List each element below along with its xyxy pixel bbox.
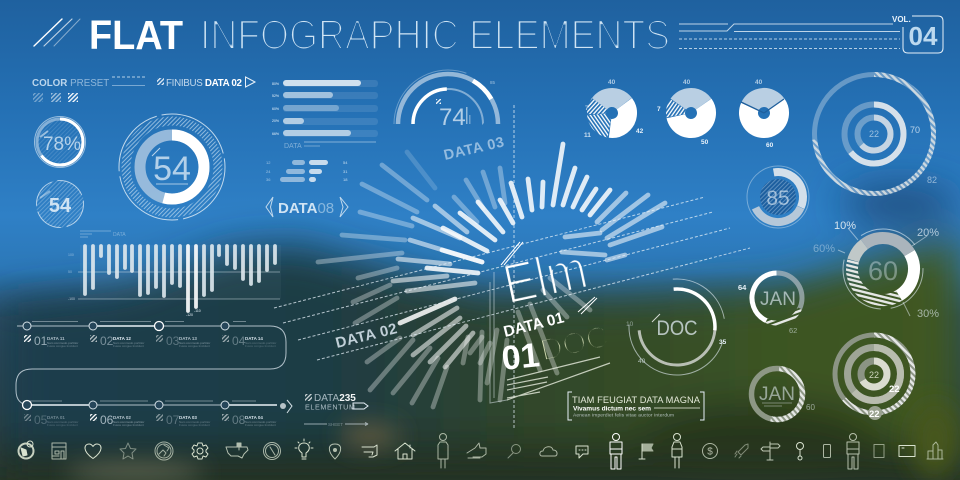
- gauge: JAN upper: JAN: [760, 289, 796, 310]
- donut: 54 large: [119, 114, 225, 220]
- icon: dollar coin: $: [707, 446, 713, 458]
- timeline row 1 labels: Nam commodo porttitor: [179, 341, 210, 345]
- gauge: 74: [380, 56, 516, 192]
- data08 label: DATA08: [278, 200, 334, 217]
- donut: 60 with percent labels: 60: [868, 256, 898, 286]
- timeline row 1 labels: Nam commodo porttitor: [47, 341, 78, 345]
- gauge: 74: 74: [439, 104, 466, 131]
- bar chart: -120: [186, 313, 193, 317]
- label: data 03: DATA 03: [442, 134, 506, 164]
- gauge: JAN lower: [749, 366, 815, 422]
- pie 3: [741, 79, 786, 149]
- timeline row 1 labels: 01: [34, 334, 48, 348]
- bar chart: -100: [68, 297, 75, 301]
- central Elm title block: 01: [500, 336, 541, 378]
- bar list chart: [272, 80, 378, 150]
- gauge: 78%: [34, 116, 86, 168]
- timeline row 1 labels: DATA 12: [113, 336, 131, 341]
- data235 elementum label: [304, 393, 368, 427]
- pie 2: 40: [683, 79, 691, 86]
- gauge: 78%: 78%: [43, 134, 81, 155]
- icon: house: [395, 443, 415, 459]
- timeline row 2 labels: Nam commodo porttitor: [113, 420, 144, 424]
- timeline row 1 labels: DATA 11: [47, 336, 65, 341]
- pie 3: 60: [766, 142, 774, 149]
- central Elm title block: [490, 237, 612, 403]
- butterfly bar chart: 12: [266, 160, 271, 165]
- gauge: 54 small: 54: [49, 195, 72, 217]
- butterfly bar chart: 24: [266, 169, 271, 174]
- icon: pointing hand: [362, 445, 377, 457]
- icon: store: [52, 443, 66, 459]
- timeline emphasis segments: [27, 326, 277, 405]
- timeline row 1 labels: Nam commodo porttitor: [113, 341, 144, 345]
- bar list chart: 20%: [272, 119, 279, 123]
- title: FLAT: FLAT: [89, 12, 183, 58]
- central Elm title block: DATA 01: [502, 309, 566, 341]
- timeline row 1 labels: 04: [232, 334, 246, 348]
- icon: woman figure 2: [672, 434, 682, 468]
- timeline row 2 labels: Fusce congue tincidunt: [113, 423, 144, 427]
- bar list chart: 60%: [272, 107, 279, 111]
- concentric rings: 22 / 70 / 82: 22: [869, 129, 879, 139]
- callout: tiam feugiat: TIAM FEUGIAT DATA MAGNA: [572, 395, 701, 405]
- timeline row 1 labels: Fusce congue tincidunt: [245, 344, 276, 348]
- color preset header: [32, 77, 145, 102]
- timeline row 2 labels: DATA 03: [179, 415, 197, 420]
- gauge: 85: 85: [766, 187, 790, 210]
- timeline row 2 labels: Nam commodo porttitor: [47, 420, 78, 424]
- gauge: DOC: [625, 275, 729, 379]
- gauge: JAN upper: [738, 265, 810, 335]
- icon: rocket: [735, 444, 748, 458]
- icon: key pin: [796, 442, 804, 460]
- bar list chart: 66%: [272, 132, 279, 136]
- gauge: DOC: 10: [626, 321, 634, 328]
- icon: gear: [192, 443, 208, 459]
- bar list chart: DATA: [284, 143, 302, 150]
- pie 1: [584, 79, 644, 139]
- icon: bulb: [295, 439, 313, 459]
- pie 1: 7: [585, 105, 589, 112]
- donut: 60 with percent labels: [813, 220, 939, 320]
- icon: buildings: [927, 442, 943, 459]
- timeline row 1 labels: 02: [100, 334, 114, 348]
- timeline row 2 labels: 06: [100, 413, 114, 427]
- timeline row 1 labels: DATA 14: [245, 336, 263, 341]
- timeline row 1 labels: Nam commodo porttitor: [245, 341, 276, 345]
- timeline row 2 labels: Fusce congue tincidunt: [179, 423, 210, 427]
- gauge: 85: [745, 164, 811, 230]
- timeline row 1 labels: Fusce congue tincidunt: [113, 344, 144, 348]
- volume badge: 04: [909, 21, 938, 51]
- icon: dollar coin: [702, 444, 718, 458]
- butterfly bar chart: 54: [343, 160, 348, 165]
- icon: man figure bright: [610, 434, 622, 469]
- pie 2: 7: [657, 106, 661, 113]
- timeline row 2 labels: Fusce congue tincidunt: [245, 423, 276, 427]
- icon: phone: [824, 444, 830, 458]
- data235 elementum label: SHEET: [328, 422, 343, 427]
- concentric rings: 22 / 70 / 82: 82: [927, 175, 937, 185]
- finibus data header: FINIBUS DATA 02: [166, 78, 243, 89]
- timeline row 1 labels: Fusce congue tincidunt: [179, 344, 210, 348]
- icon: tablet: [874, 444, 884, 458]
- icon: globe pin: [18, 441, 34, 458]
- concentric rings: 22 lower: [835, 335, 913, 420]
- central Elm title block: Elm: [497, 237, 593, 316]
- icon: magnifier: [508, 444, 520, 458]
- bar chart: DATA: [113, 232, 126, 238]
- concentric rings: 22 lower: 22: [889, 384, 900, 395]
- timeline row 2 labels: 08: [232, 413, 246, 427]
- icon: man figure: [847, 434, 859, 469]
- donut: 60 with percent labels: 30%: [917, 308, 939, 320]
- sunburst rays: [318, 144, 665, 407]
- gauge: JAN lower: 60: [806, 403, 815, 412]
- pie 2: 50: [701, 139, 709, 146]
- donut: 54 large: 54: [153, 150, 191, 188]
- timeline row 2 labels: 07: [166, 413, 180, 427]
- title slashes: [34, 19, 80, 46]
- gauge: JAN upper: 62: [789, 326, 797, 335]
- donut: 60 with percent labels: 10%: [834, 220, 856, 232]
- gauge: 54 small: [36, 180, 84, 228]
- icon: map marker: [329, 444, 341, 459]
- gauge: DOC: 40: [638, 358, 646, 365]
- gauge: DOC: DOC: [656, 317, 698, 340]
- icon: cloud: [540, 447, 557, 456]
- timeline path: [16, 326, 286, 405]
- icon: woman figure: [438, 434, 448, 468]
- bar chart: 100: [68, 253, 74, 257]
- timeline row 1 labels: Fusce congue tincidunt: [47, 344, 78, 348]
- callout: tiam feugiat: Aenean imperdiet felis vitae auctor interdum: [573, 412, 674, 418]
- donut: 60 with percent labels: 60%: [813, 243, 835, 255]
- donut: 60 with percent labels: 20%: [917, 227, 939, 239]
- butterfly bar chart: [266, 160, 348, 182]
- butterfly bar chart: 31: [343, 169, 348, 174]
- central Elm title block: DOC: [537, 318, 612, 368]
- icon: heart: [85, 444, 101, 458]
- butterfly bar chart: 18: [343, 177, 348, 182]
- icon: clock: [264, 442, 280, 460]
- concentric rings: 22 lower: 22: [869, 370, 879, 380]
- data235 elementum label: DATA235: [314, 393, 356, 404]
- timeline row 2 labels: Nam commodo porttitor: [179, 420, 210, 424]
- timeline row 1 labels: [24, 334, 276, 348]
- icon: world: [155, 442, 173, 460]
- pie 2: [657, 79, 713, 146]
- callout: tiam feugiat: Vivamus dictum nec sem: [573, 406, 651, 412]
- icon: star: [120, 443, 136, 459]
- title: INFOGRAPHIC ELEMENTS: INFOGRAPHIC ELEMENTS: [200, 11, 670, 58]
- gauge: 74: 85: [490, 80, 496, 85]
- data08 label: [266, 197, 348, 217]
- callout: tiam feugiat: [568, 392, 704, 420]
- icon: chat bubble: [576, 446, 588, 458]
- butterfly bar chart: 36: [266, 177, 271, 182]
- data235 elementum label: ELEMENTUM: [305, 402, 356, 412]
- concentric rings: 22 / 70 / 82: 70: [910, 125, 920, 135]
- timeline row 2 labels: [24, 413, 276, 427]
- concentric rings: 22 / 70 / 82: [814, 74, 937, 194]
- bar chart: -110: [194, 309, 201, 313]
- icon: laptop: [899, 446, 915, 456]
- timeline row 2 labels: 05: [34, 413, 48, 427]
- color preset header: COLOR PRESET: [32, 78, 109, 89]
- bar list chart: 80%: [272, 82, 279, 86]
- gauge: JAN upper: 64: [738, 283, 747, 292]
- volume badge: VOL.: [892, 15, 911, 24]
- icon: flag: [639, 444, 653, 459]
- pie 3: 40: [755, 79, 763, 86]
- timeline row 1 labels: 03: [166, 334, 180, 348]
- timeline row 2 labels: DATA 04: [245, 415, 263, 420]
- timeline nodes: [22, 322, 292, 413]
- pie 1: 11: [584, 132, 591, 139]
- timeline row 2 labels: DATA 02: [113, 415, 131, 420]
- icon: signpost: [761, 442, 780, 460]
- pie 1: 42: [636, 128, 644, 135]
- timeline row 2 labels: Nam commodo porttitor: [245, 420, 276, 424]
- bar chart: [68, 231, 281, 317]
- timeline row 1 labels: DATA 13: [179, 336, 197, 341]
- gauge: DOC: 35: [719, 339, 727, 346]
- bar chart: 50: [68, 270, 72, 274]
- pie 1: 40: [608, 79, 616, 86]
- bar list chart: 52%: [272, 94, 279, 98]
- icon: thumb hand: [467, 443, 486, 458]
- timeline row 2 labels: Fusce congue tincidunt: [47, 423, 78, 427]
- volume badge: [679, 15, 943, 53]
- label: data 02: DATA 02: [334, 320, 399, 352]
- concentric rings: 22 lower: 22: [869, 409, 880, 420]
- icon: usa map with pin: [226, 443, 248, 458]
- diagonal dashed lines: [274, 105, 750, 430]
- gauge: JAN lower: JAN: [759, 384, 795, 405]
- timeline row 2 labels: DATA 01: [47, 415, 65, 420]
